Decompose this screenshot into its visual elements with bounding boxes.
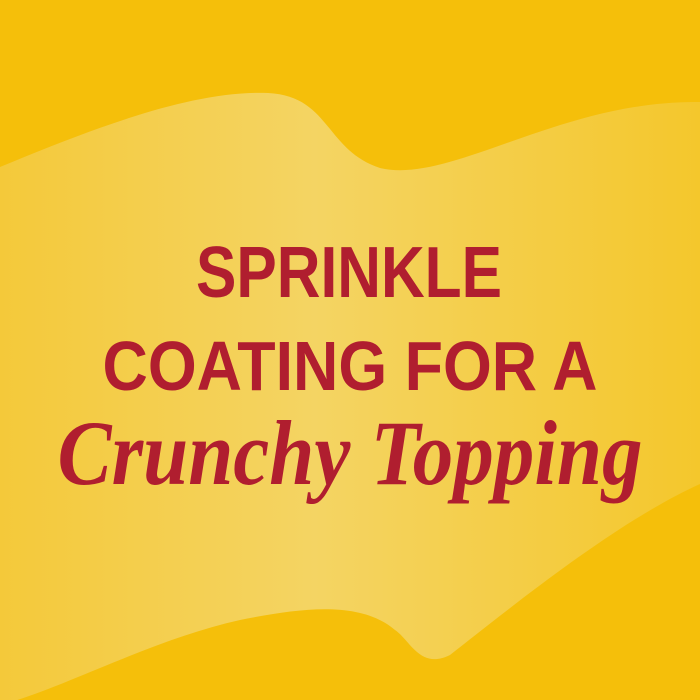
title line: COATING FOR A: COATING FOR A [102, 327, 598, 405]
title [58, 233, 642, 504]
title line: SPRINKLE: SPRINKLE [196, 233, 502, 313]
